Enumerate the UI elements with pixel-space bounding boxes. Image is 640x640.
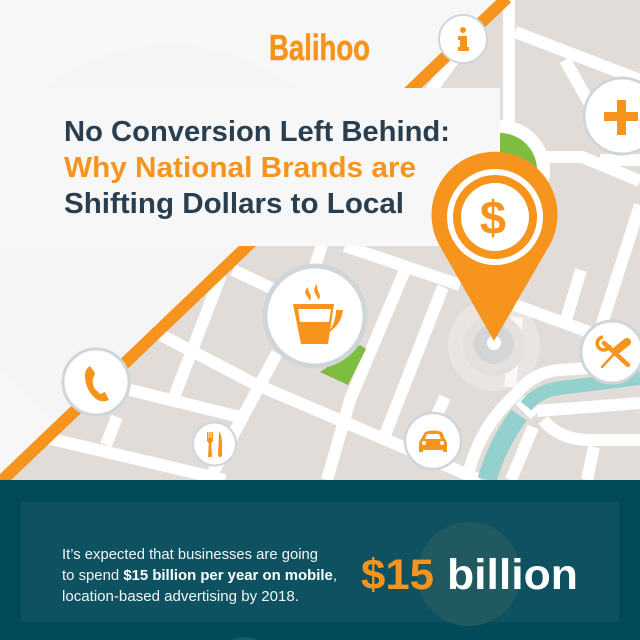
- icon: info: [439, 15, 487, 63]
- logo: Balihoo: Balihoo: [269, 27, 370, 68]
- icon: map pin with dollar: $: [480, 191, 506, 244]
- title: Shifting Dollars to Local: [64, 188, 404, 220]
- street map: [0, 0, 640, 480]
- statistic figure: $15: [361, 551, 434, 599]
- icon: phone: [63, 349, 129, 415]
- panel: title background: [0, 88, 500, 246]
- park: green block: [320, 345, 366, 385]
- diagonal orange road: [0, 0, 507, 490]
- icon: plus: [584, 78, 640, 154]
- panel: bottom band: [0, 480, 640, 640]
- icon: coffee cup: [265, 266, 365, 366]
- statistic description: It’s expected that businesses are going: [62, 546, 318, 563]
- statistic description: to spend $15 billion per year on mobile,: [62, 567, 337, 584]
- statistic figure: billion: [447, 551, 578, 599]
- location signal rings: [448, 299, 540, 391]
- title: No Conversion Left Behind:: [64, 116, 450, 148]
- park: green area behind pin: [450, 120, 550, 220]
- icon: fork and knife: [193, 422, 236, 466]
- statistic figure: [361, 551, 578, 599]
- icon: tools: [581, 321, 640, 383]
- icon: map pin with dollar: [432, 152, 558, 341]
- panel: statistic: [21, 502, 619, 640]
- icon: car: [405, 413, 461, 469]
- statistic description: [62, 546, 337, 605]
- title: [64, 116, 450, 220]
- statistic description: location-based advertising by 2018.: [62, 588, 299, 605]
- title: Why National Brands are: [64, 152, 416, 184]
